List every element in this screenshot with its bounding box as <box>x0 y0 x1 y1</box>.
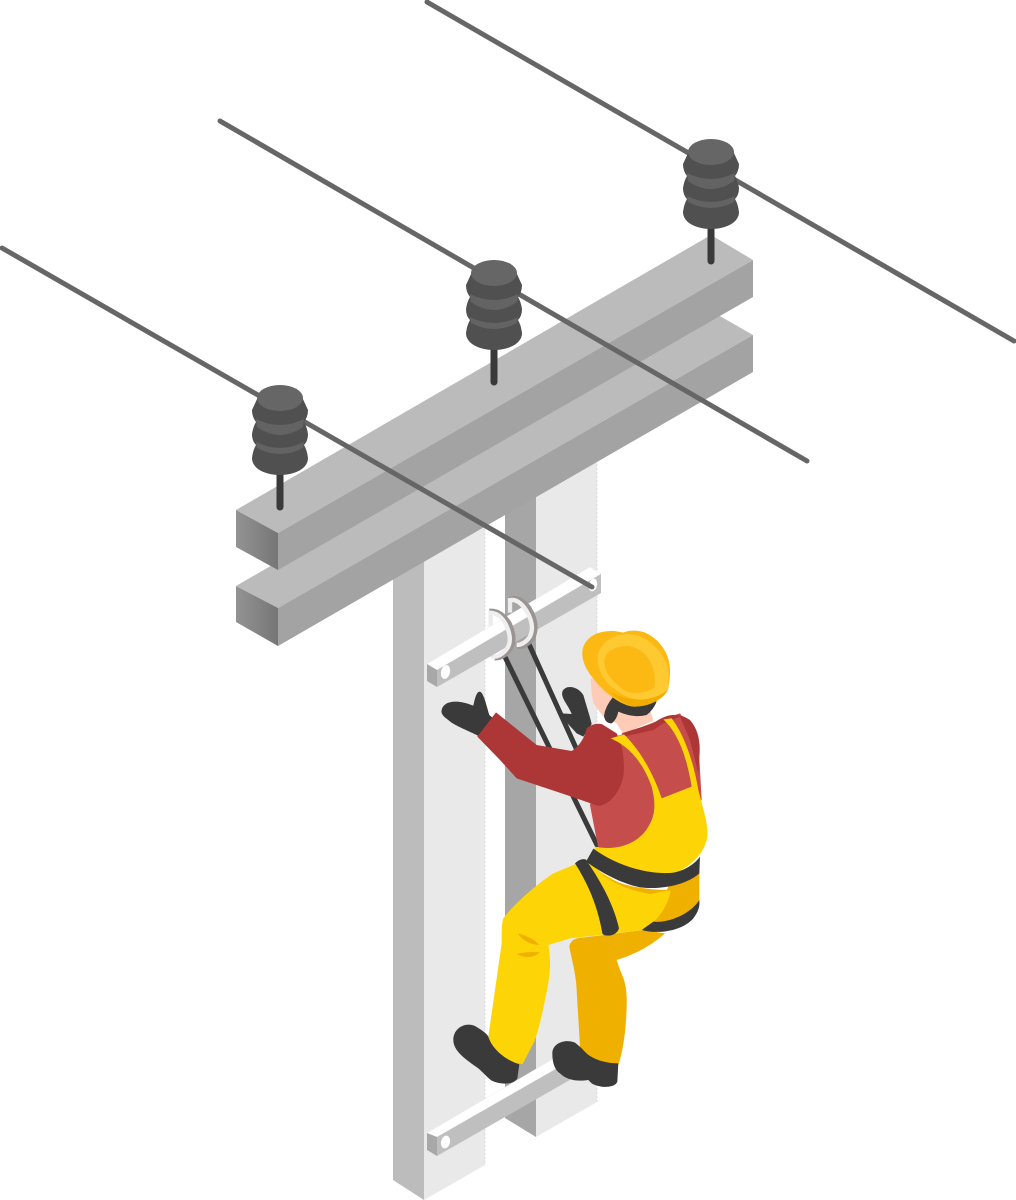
front pole <box>393 500 485 1200</box>
insulator left <box>252 385 308 507</box>
wire 1 <box>2 248 592 587</box>
neck and face <box>591 678 653 734</box>
seat strap <box>642 900 699 932</box>
far boot <box>552 1041 618 1087</box>
far hip <box>652 870 699 923</box>
safety rings, front half <box>488 598 535 658</box>
overalls bib <box>593 718 707 875</box>
safety rings, rear half <box>490 598 510 657</box>
lower climbing crossarm <box>427 1052 575 1156</box>
insulator middle <box>466 260 522 382</box>
far hand <box>562 687 592 737</box>
wire 2 <box>220 121 807 461</box>
wire 3 <box>427 2 1014 341</box>
worker <box>441 631 707 1087</box>
safety straps <box>505 642 598 847</box>
torso <box>590 713 702 848</box>
shoulder shade <box>622 715 700 773</box>
upper cross beam <box>236 235 753 570</box>
far leg <box>569 930 665 1065</box>
chin strap and hair <box>589 673 657 723</box>
waist shadow <box>597 870 671 894</box>
near leg <box>488 859 671 1064</box>
worker upper body <box>441 631 707 888</box>
near arm <box>477 712 624 806</box>
near boot <box>453 1025 519 1084</box>
insulator right <box>683 139 739 261</box>
thigh strap <box>575 859 619 936</box>
back pole <box>505 440 597 1137</box>
worker legs and harness <box>453 859 699 1087</box>
upper climbing crossarm <box>427 567 601 687</box>
near hand <box>441 692 495 738</box>
lower cross beam <box>236 311 753 646</box>
waist belt <box>586 849 700 888</box>
knee creases <box>517 933 540 957</box>
helmet <box>582 631 670 707</box>
